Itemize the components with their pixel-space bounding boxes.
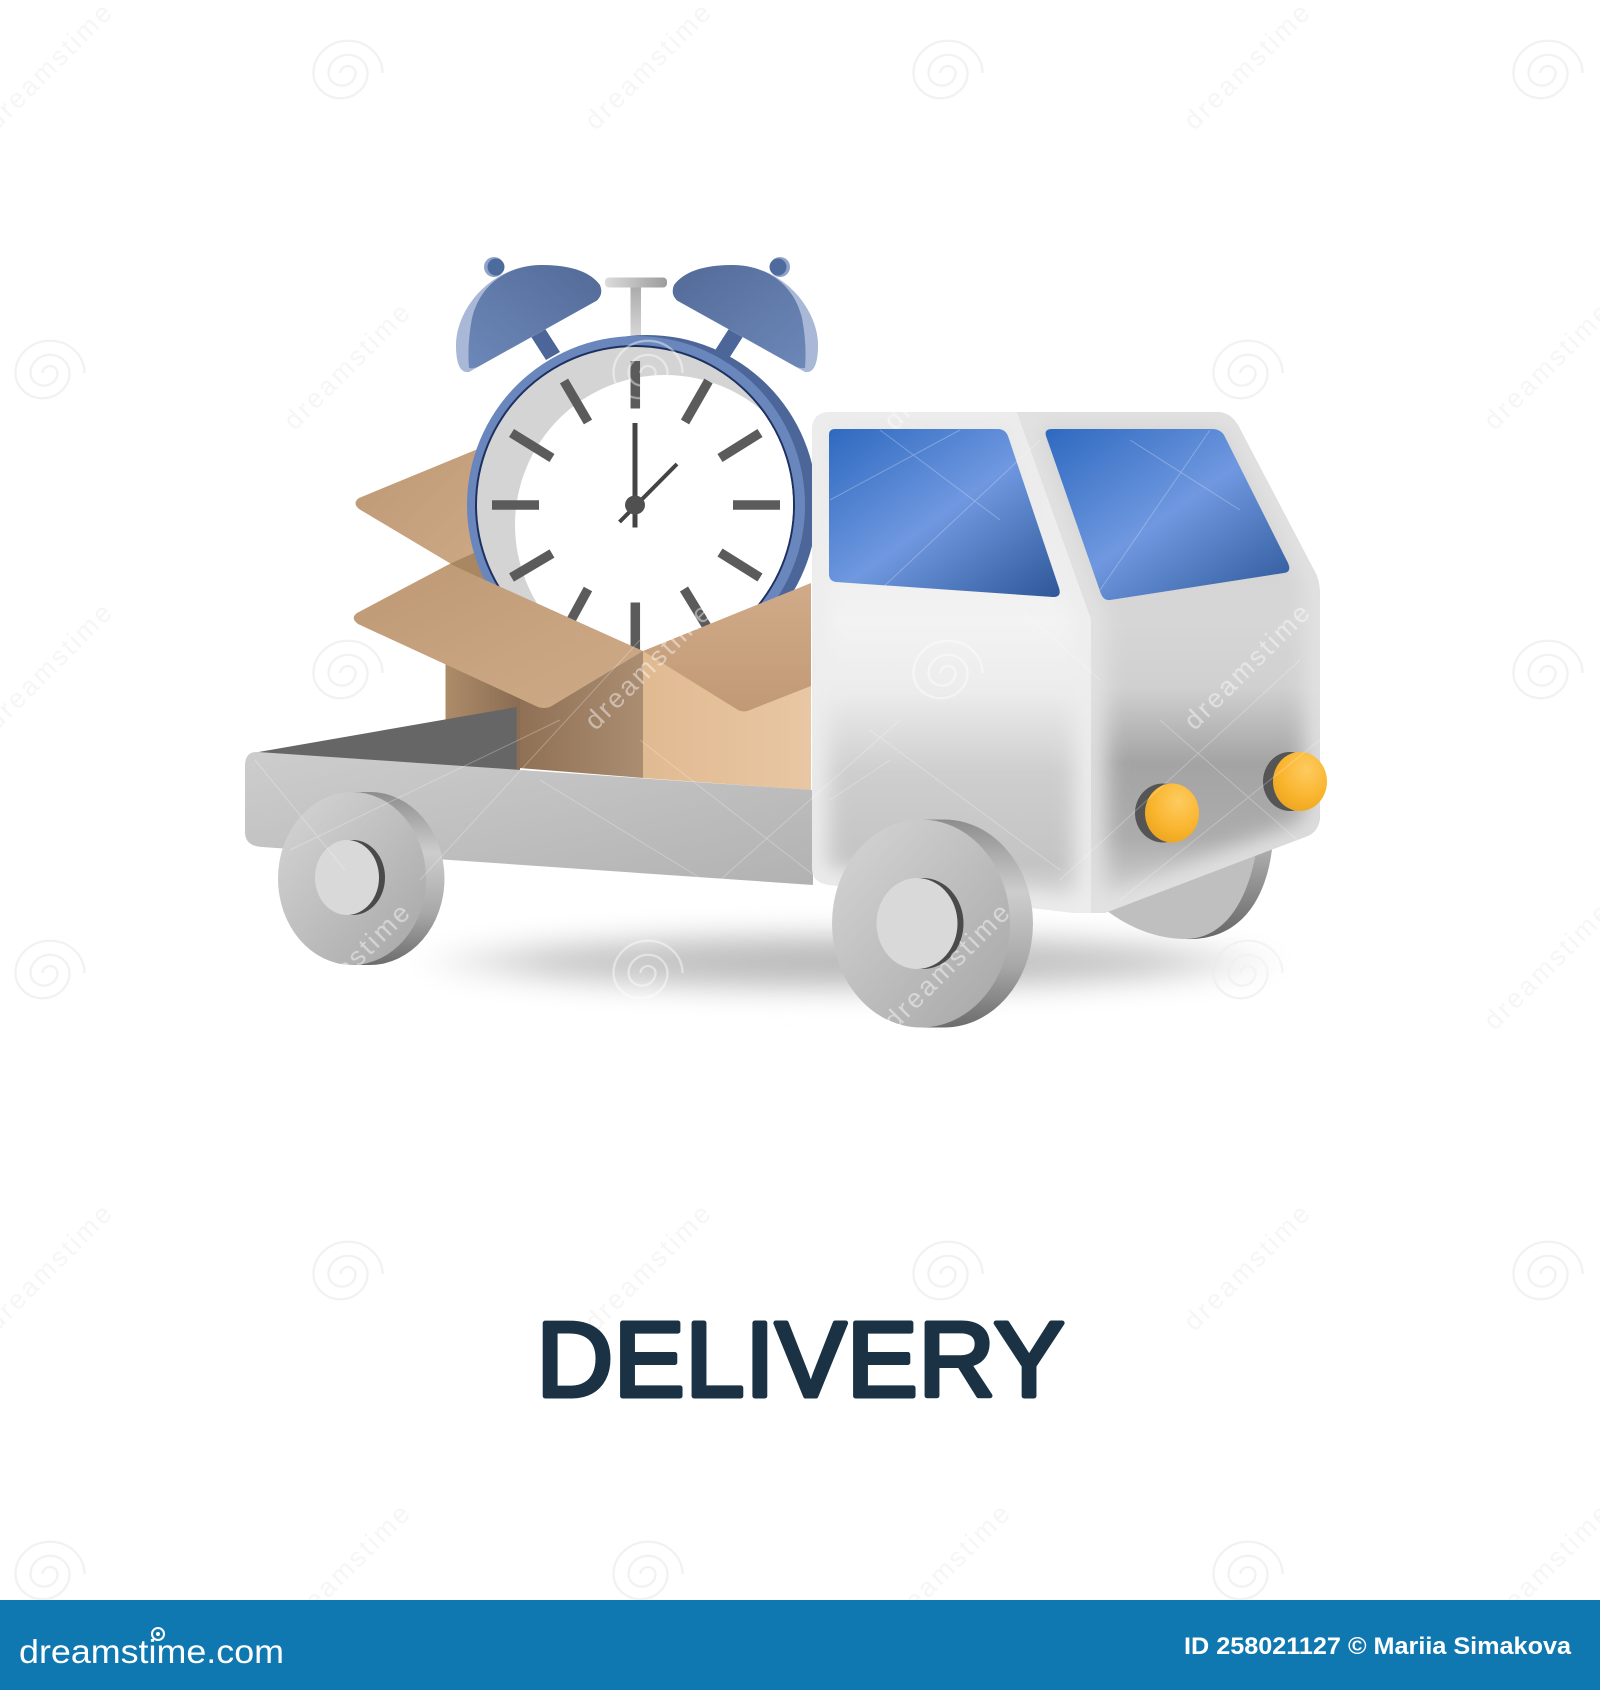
rear wheel xyxy=(278,792,444,965)
windshield xyxy=(1046,429,1289,600)
watermark pattern: dreamstime xyxy=(1178,1199,1316,1337)
far front wheel xyxy=(1088,830,1273,939)
ground shadow xyxy=(410,928,1290,996)
watermark over truck xyxy=(255,298,1320,1036)
box right face xyxy=(643,600,811,790)
box front-left flap xyxy=(354,564,643,708)
right headlight xyxy=(1263,752,1327,811)
cab front xyxy=(1017,412,1320,913)
watermark over truck: dreamstime xyxy=(878,898,1016,1036)
right bell xyxy=(673,257,818,372)
cab side xyxy=(812,412,1091,913)
footer credit: ID 258021127 © Mariia Simakova xyxy=(1184,1633,1572,1660)
clock ticks xyxy=(492,361,780,650)
icon: alarm clock xyxy=(456,257,818,675)
box left face xyxy=(446,651,643,778)
clock face xyxy=(477,347,793,651)
clock hands xyxy=(620,423,677,528)
truck flatbed xyxy=(245,752,813,885)
watermark over truck: dreamstime xyxy=(278,898,416,1036)
watermark over truck: dreamstime xyxy=(579,598,717,736)
cardboard box xyxy=(354,564,811,790)
watermark pattern: dreamstime xyxy=(1178,0,1316,136)
watermark pattern: dreamstime xyxy=(278,298,416,436)
truck bed inner wall xyxy=(256,707,517,772)
watermark pattern: dreamstime xyxy=(278,1499,416,1637)
watermark pattern: dreamstime xyxy=(878,1499,1016,1637)
clock top handle xyxy=(605,278,667,337)
left bell xyxy=(456,257,601,372)
clock body xyxy=(467,335,817,675)
box front-right flap xyxy=(643,583,811,712)
footer band xyxy=(0,1600,1600,1690)
side window xyxy=(829,429,1060,597)
footer logo: dreamstime.com xyxy=(19,1633,284,1670)
title: DELIVERY xyxy=(536,1301,1064,1419)
icon: delivery truck with clock and box xyxy=(245,257,1327,1028)
watermark pattern: dreamstime xyxy=(579,0,717,136)
front wheel xyxy=(832,820,1033,1028)
box back flap xyxy=(356,444,505,592)
watermark pattern: dreamstime xyxy=(579,1199,717,1337)
watermark over truck: dreamstime xyxy=(878,298,1016,436)
left headlight xyxy=(1135,784,1199,842)
watermark over truck: dreamstime xyxy=(1178,598,1316,736)
